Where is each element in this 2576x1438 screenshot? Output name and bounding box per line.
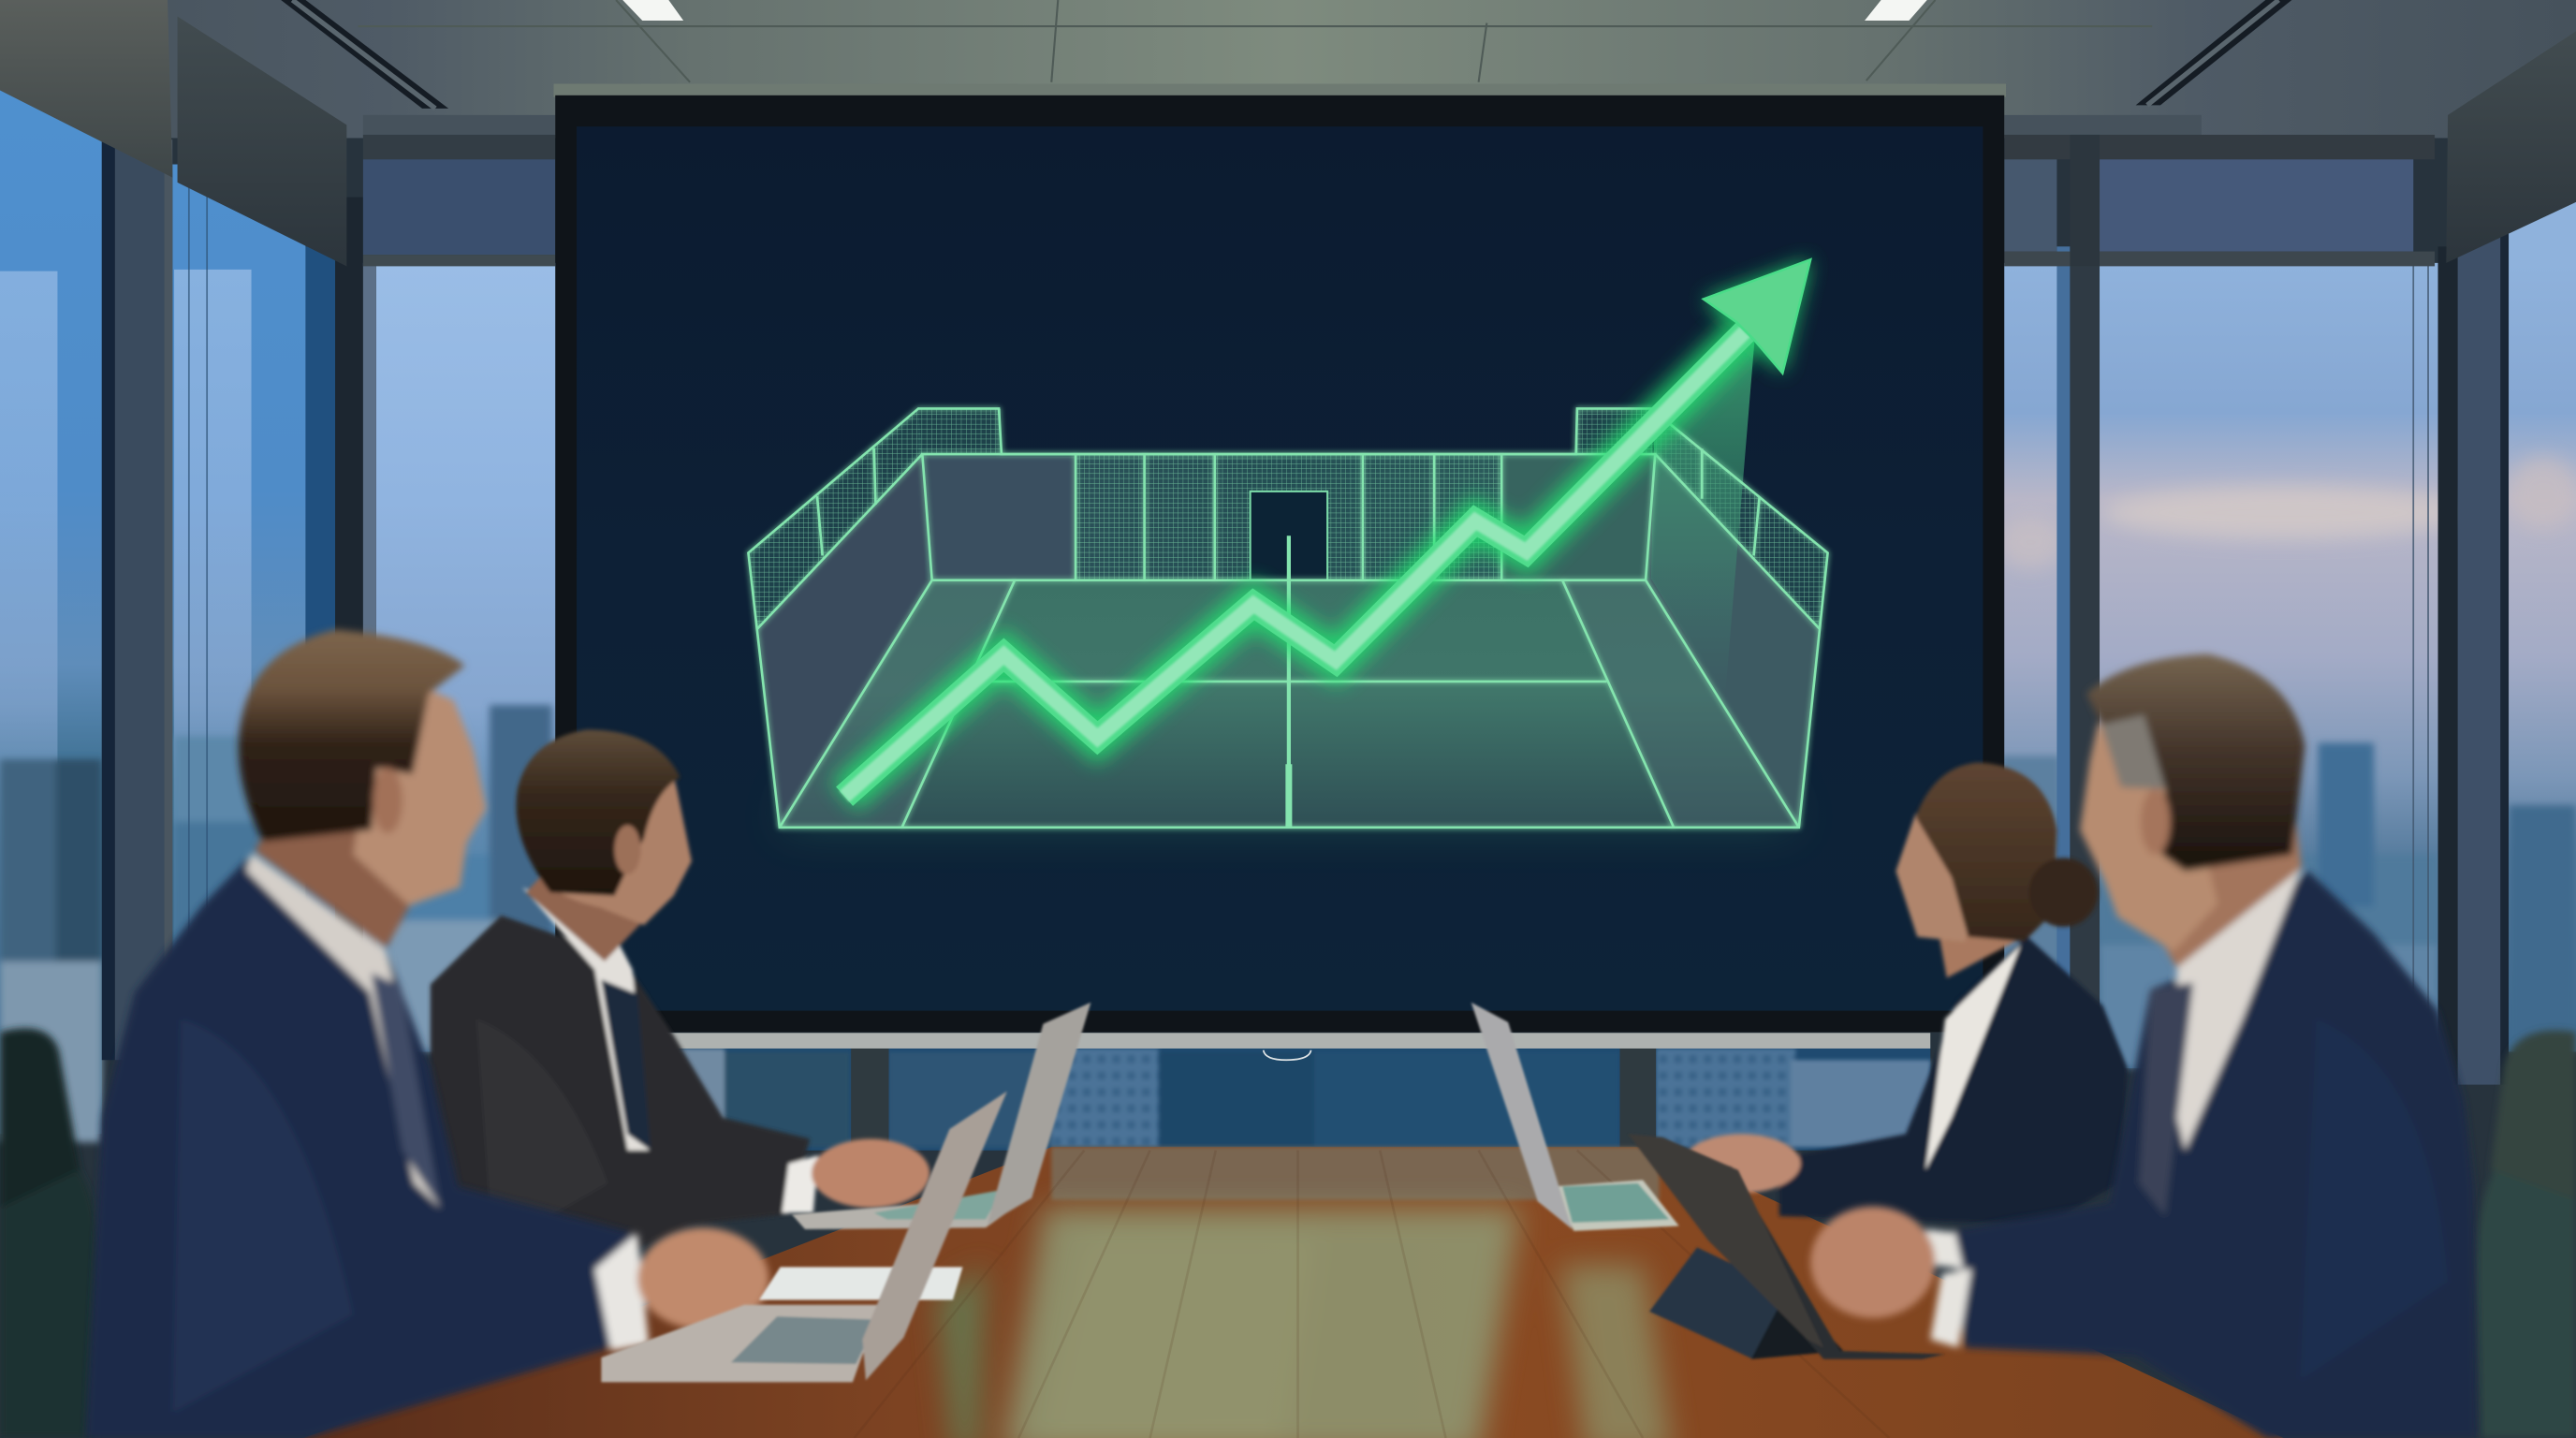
chair left [0,1028,98,1438]
neck [255,805,411,948]
right blinds [2004,31,2576,266]
screen surface [577,126,1983,1011]
court lines [748,408,1828,828]
ceiling vent left [281,0,448,109]
table wood grain [855,1151,1889,1438]
person 2: man in charcoal suit [431,729,929,1314]
court soft glow [779,580,1799,827]
person 3: woman in dark blazer [1682,763,2128,1225]
floor [779,580,1799,827]
left wall [757,453,931,827]
ceiling light right [1865,0,1927,21]
back wall mesh [1076,455,1501,580]
hair [2086,654,2305,871]
ear [2141,789,2170,855]
ceiling light left [622,0,683,21]
projector screen [555,95,2004,1060]
hair [239,629,465,842]
grey temple [2101,715,2165,789]
laptop front left [601,1092,1007,1382]
screen bottom rail [662,1033,1930,1049]
left windows [0,82,557,1142]
green screen reflection [936,1208,1673,1438]
rising arrow [844,259,1810,797]
face [353,690,487,905]
corner mesh posts [918,409,1001,453]
left skyline [0,705,557,1142]
face [2080,723,2217,951]
ear [373,768,402,833]
laptop back right [1471,1003,1679,1231]
ceiling [0,0,2576,138]
rail hook [1264,1050,1311,1060]
neck [2136,789,2302,968]
green beam under arrow [1651,340,1754,698]
right windows [1998,198,2576,1068]
lower window strip under screen [662,1045,1930,1151]
person 4: man in navy suit [1810,654,2478,1438]
tablet with stand [1628,1134,1945,1359]
right clouds [1998,457,2576,568]
ceiling vent right [2136,0,2291,105]
left mullions [102,139,376,1060]
back wall door [1251,492,1327,580]
right skyline [2001,742,2576,1068]
back wall [922,453,1654,580]
court centre line [1288,536,1290,827]
conference table [304,1147,2284,1438]
laptop back left [792,1003,1090,1229]
side fence meshes [748,409,922,629]
paper on table [759,1267,962,1300]
right mullions [2056,198,2509,1085]
chair right [2475,1031,2576,1438]
screen frame [555,95,2004,1032]
right wall [1647,453,1819,827]
squash court wireframe [748,340,1828,828]
left blinds [0,0,555,266]
person 1: man in navy suit [85,629,768,1438]
